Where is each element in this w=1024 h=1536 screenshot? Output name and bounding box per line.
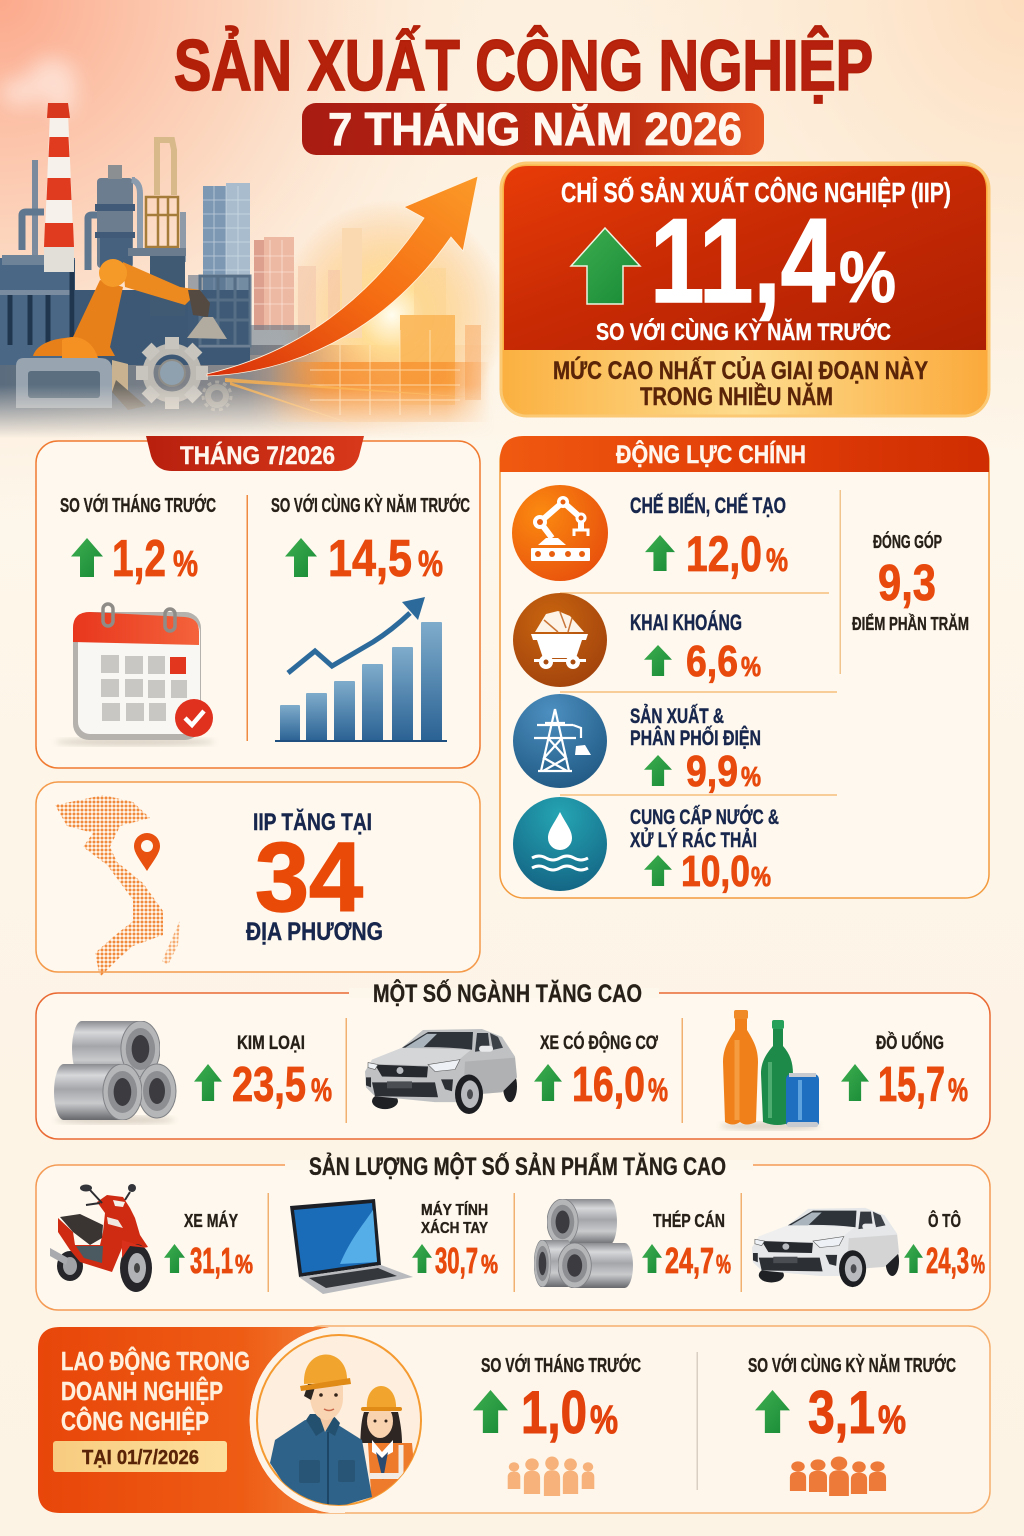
stat: electricity: % <box>741 761 761 792</box>
stat: cars: Ô TÔ <box>928 1210 961 1231</box>
date tag <box>53 1441 227 1472</box>
stat: water: % <box>751 861 771 892</box>
stat: metals: KIM LOẠI <box>237 1033 305 1054</box>
panel: key drivers <box>500 436 989 898</box>
band heading: LAO ĐỘNG TRONG <box>61 1346 250 1376</box>
stat: rolled steel: % <box>716 1249 731 1279</box>
stat: laptops <box>412 1200 498 1281</box>
stat: mining: 6,6 <box>686 637 738 686</box>
stat: motor vehicles <box>534 1032 668 1112</box>
stat: metals <box>194 1033 332 1112</box>
value: 11,4 <box>650 194 835 328</box>
panel: labour <box>38 1326 990 1513</box>
stat: versus same period <box>271 493 470 588</box>
comparison note: SO VỚI CÙNG KỲ NĂM TRƯỚC <box>596 318 891 346</box>
stat: versus previous month <box>473 1353 641 1446</box>
stat: electricity <box>630 705 761 796</box>
stat: electricity: PHÂN PHỐI ĐIỆN <box>630 726 761 750</box>
panel: IIP headline <box>501 163 989 416</box>
stat: motor vehicles: 16,0 <box>572 1058 645 1112</box>
text: 34 localities: ĐỊA PHƯƠNG <box>246 918 383 946</box>
icon: mine cart <box>513 593 607 687</box>
stat: versus same period: 14,5 <box>328 530 412 588</box>
stat: cars <box>904 1210 985 1281</box>
heading: SẢN LƯỢNG MỘT SỐ SẢN PHẨM TĂNG CAO <box>309 1151 726 1181</box>
stat: versus previous month: SO VỚI THÁNG TRƯỚC <box>60 493 216 517</box>
left orange band <box>38 1327 330 1513</box>
band heading: CÔNG NGHIỆP <box>61 1406 209 1436</box>
stat: beverages <box>841 1032 968 1112</box>
stat: laptops: MÁY TÍNH <box>421 1200 488 1219</box>
stat: rolled steel <box>642 1210 731 1281</box>
icon: laptop <box>290 1199 413 1294</box>
stat: water <box>630 805 779 896</box>
stat: beverages: % <box>948 1072 968 1108</box>
stat: motorbikes: % <box>235 1249 253 1279</box>
stat: manufacturing: % <box>766 542 788 578</box>
industrial plant <box>0 140 310 365</box>
icon: beverage bottles and can <box>720 1010 820 1130</box>
stat: contribution: 9,3 <box>878 554 936 611</box>
icon: rolled steel <box>534 1199 633 1288</box>
highlight note: MỨC CAO NHẤT CỦA GIAI ĐOẠN NÀY <box>553 355 928 385</box>
tab heading: THÁNG 7/2026 <box>180 441 335 470</box>
icon: silver SUV <box>365 1029 517 1114</box>
stat: motor vehicles: % <box>648 1072 668 1108</box>
stat: electricity: 9,9 <box>686 747 738 796</box>
bar chart with rising line <box>275 597 447 742</box>
stat: motorbikes <box>164 1210 253 1281</box>
smoke <box>0 58 76 115</box>
far skyline buildings <box>270 228 490 422</box>
stat: versus same period: % <box>418 543 443 584</box>
stat: motor vehicles: XE CÓ ĐỘNG CƠ <box>540 1032 659 1054</box>
stat: beverages: 15,7 <box>878 1058 945 1112</box>
stat: mining: KHAI KHOÁNG <box>630 610 742 635</box>
stat: contribution <box>852 531 969 634</box>
skyscraper towers <box>203 183 294 330</box>
stat: rolled steel: 24,7 <box>665 1240 714 1281</box>
stat: cars: 24,3 <box>926 1240 969 1281</box>
stat: contribution: ĐÓNG GÓP <box>873 531 942 552</box>
stat: laptops: % <box>481 1249 498 1279</box>
light streaks <box>225 378 469 420</box>
hero illustration: factory skyline with robot arm and rising arrow <box>0 58 507 445</box>
stat: laptops: 30,7 <box>435 1240 478 1281</box>
highlight note: TRONG NHIỀU NĂM <box>640 382 833 411</box>
stat: water: XỬ LÝ RÁC THẢI <box>630 828 757 852</box>
icon: calendar <box>55 604 215 746</box>
stat: water: CUNG CẤP NƯỚC & <box>630 805 779 829</box>
stat: manufacturing: 12,0 <box>686 526 762 582</box>
band heading: DOANH NGHIỆP <box>61 1376 223 1406</box>
icon: water drop <box>513 797 607 891</box>
icon: power pylon <box>513 694 607 788</box>
gears <box>136 337 231 410</box>
scene artwork fading into the page <box>0 58 507 445</box>
stat: electricity: SẢN XUẤT & <box>630 705 724 728</box>
stat: versus previous month: 1,2 <box>112 530 166 588</box>
heading: MỘT SỐ NGÀNH TĂNG CAO <box>373 978 642 1008</box>
icon: white car <box>752 1208 899 1287</box>
tab heading <box>146 436 364 471</box>
robot arm <box>33 259 227 358</box>
header bar <box>500 436 989 472</box>
band heading <box>61 1346 250 1436</box>
machine base <box>16 358 146 410</box>
text: 34 localities <box>246 808 383 946</box>
illustration: two workers <box>257 1335 421 1510</box>
stat: manufacturing <box>630 493 788 582</box>
icon: red scooter <box>50 1184 152 1292</box>
text: 34 localities: IIP TĂNG TẠI <box>253 808 372 836</box>
stat: versus previous month <box>60 493 216 588</box>
stat: versus same period <box>748 1353 956 1446</box>
stat: versus previous month: SO VỚI THÁNG TRƯỚC <box>481 1353 641 1377</box>
stat: laptops: XÁCH TAY <box>421 1218 488 1237</box>
stat: contribution: ĐIỂM PHẦN TRĂM <box>852 613 969 634</box>
percent sign: % <box>839 238 896 318</box>
ground band <box>0 345 484 436</box>
date tag: TẠI 01/7/2026 <box>82 1447 199 1469</box>
stat: motorbikes: XE MÁY <box>184 1210 238 1231</box>
panel: high-growth products <box>36 1151 990 1310</box>
sun glow <box>291 205 500 392</box>
header bar: ĐỘNG LỰC CHÍNH <box>616 439 806 469</box>
icon: steel coils <box>54 1021 176 1124</box>
icon: location pin <box>134 833 160 871</box>
highlight note <box>553 355 928 411</box>
stat: versus same period: 3,1 <box>808 1379 875 1446</box>
stat: versus previous month: % <box>590 1398 618 1442</box>
icon: big green up arrow <box>571 228 640 304</box>
stat: motorbikes: 31,1 <box>190 1240 233 1281</box>
stat: water: 10,0 <box>681 847 750 896</box>
stat: cars: % <box>971 1249 985 1279</box>
red and white chimney <box>44 103 74 272</box>
icon: people group light <box>508 1456 594 1496</box>
rising orange arrow <box>207 176 478 376</box>
stat: manufacturing: CHẾ BIẾN, CHẾ TẠO <box>630 493 786 518</box>
stat: beverages: ĐỒ UỐNG <box>876 1032 944 1054</box>
text: 34 localities: 34 <box>255 822 363 932</box>
stat: versus previous month: % <box>173 543 198 584</box>
map of Vietnam <box>55 795 180 977</box>
stat: mining: % <box>741 651 761 682</box>
icon: people group dark <box>790 1456 886 1496</box>
stat: rolled steel: THÉP CÁN <box>653 1210 725 1231</box>
subtitle pill: 7 THÁNG NĂM 2026 <box>328 103 742 155</box>
stat: versus same period: % <box>878 1398 906 1442</box>
panel: provinces <box>36 782 480 977</box>
stat: metals: 23,5 <box>232 1058 306 1112</box>
stat: versus previous month: 1,0 <box>521 1379 587 1446</box>
stat: metals: % <box>311 1072 332 1108</box>
stat: versus same period: SO VỚI CÙNG KỲ NĂM TRƯỚC <box>271 493 470 517</box>
panel: high-growth sectors <box>36 978 990 1139</box>
panel: month 7/2026 <box>36 436 480 768</box>
icon: robot on conveyor <box>512 485 608 581</box>
stat: mining <box>630 610 761 686</box>
